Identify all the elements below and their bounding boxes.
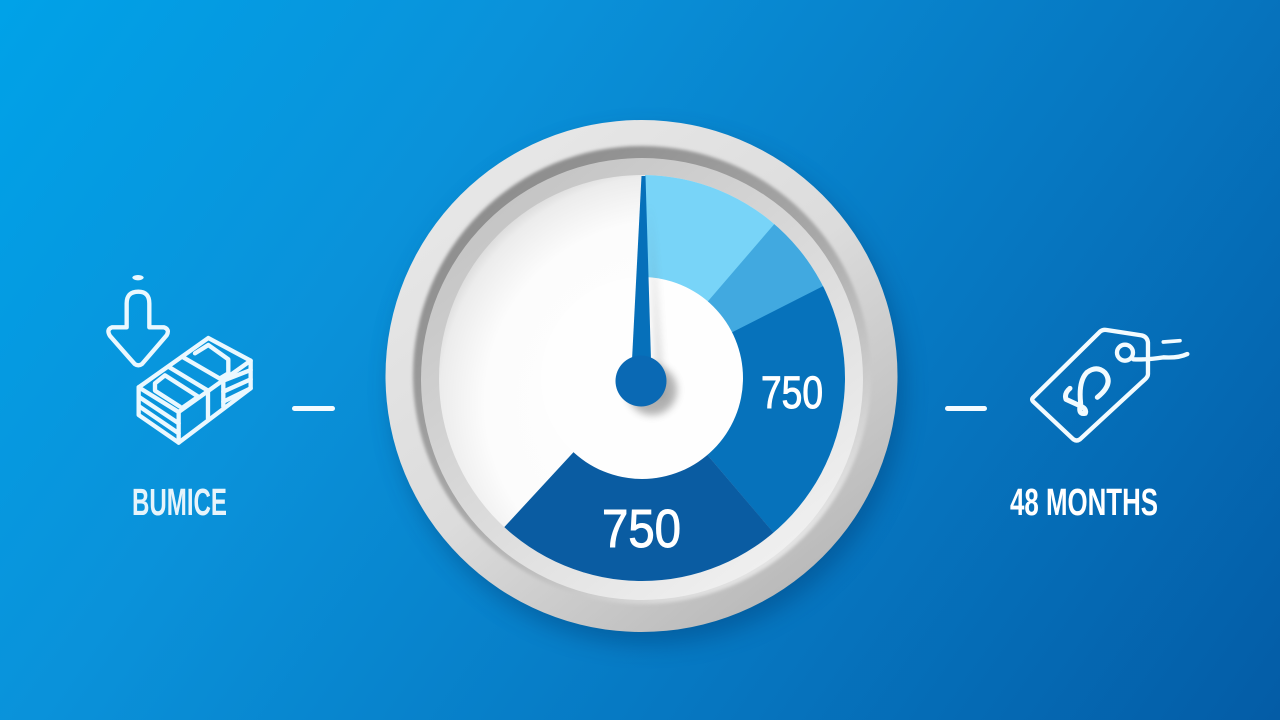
tag hole [1117, 345, 1133, 361]
dial segments [504, 175, 845, 581]
bezel groove [413, 146, 871, 604]
segment: dark blue [504, 452, 774, 581]
right label: 48 MONTHS [1010, 482, 1158, 524]
dollar symbol [1065, 369, 1108, 414]
segment: blue [708, 286, 845, 533]
down arrow [108, 292, 168, 365]
value: 750 small: 750 [761, 367, 823, 418]
string accent [1163, 341, 1180, 342]
gauge drop shadow [392, 132, 904, 644]
right icon: price tag [1032, 330, 1187, 440]
tag outline [1032, 330, 1148, 440]
gauge outer bezel [386, 120, 898, 632]
needle [616, 176, 677, 415]
left dash [292, 406, 335, 411]
left label: BUMICE [132, 482, 227, 524]
segment: medium blue [708, 224, 824, 332]
gauge [386, 120, 904, 644]
arrow top dot [132, 275, 144, 280]
segment: light blue [645, 175, 775, 302]
money stack [139, 338, 251, 443]
tag string [1133, 354, 1187, 359]
value: 750 large: 750 [602, 499, 681, 559]
inner white disc [541, 277, 743, 479]
left icon: down arrow and money stack [108, 275, 251, 443]
inner bezel ring [421, 158, 863, 600]
right dash [945, 406, 987, 411]
dial face [439, 175, 845, 581]
